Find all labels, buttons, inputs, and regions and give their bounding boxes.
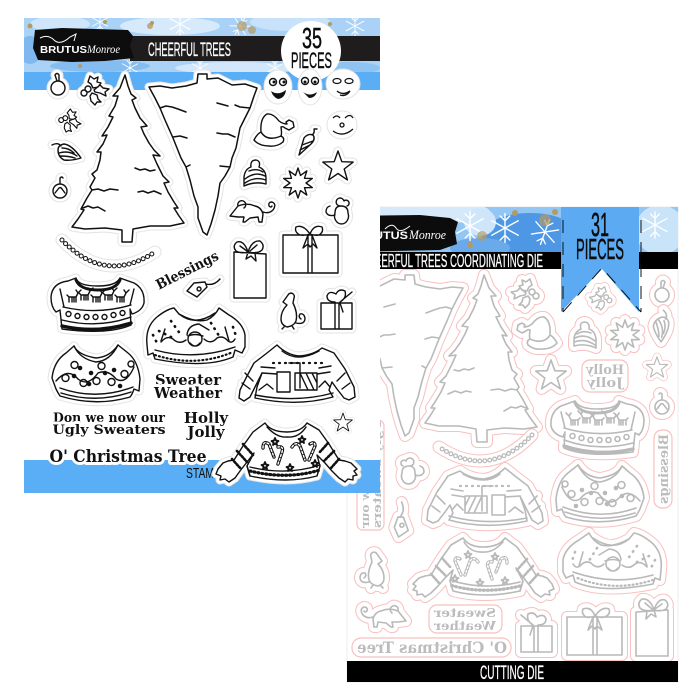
die: standing mouse xyxy=(360,552,384,588)
die: candy cane sweater xyxy=(413,538,554,597)
die: don we now text: Don we now our xyxy=(359,418,372,528)
stamp: holly jolly text: Holly xyxy=(184,409,229,427)
ribbon: 31 pieces xyxy=(561,206,641,312)
die: santa hat xyxy=(517,317,557,349)
die: mouse with curled tail xyxy=(361,606,406,627)
stamp: holly jolly text: Jolly xyxy=(185,423,226,441)
stamp: small star xyxy=(334,413,352,431)
stamp: face two xyxy=(298,69,322,105)
ribbon: 31 pieces: PIECES xyxy=(576,234,624,266)
die: garland xyxy=(439,435,532,461)
blue band bottom with label: STAMP xyxy=(186,465,221,482)
logo: Brutus Monroe xyxy=(33,28,134,62)
die: tag xyxy=(388,502,418,540)
die: round mouse xyxy=(401,458,424,484)
die: sweater weather text xyxy=(429,605,502,633)
die: large star xyxy=(536,360,566,389)
blue band top xyxy=(24,72,380,90)
die: holly small xyxy=(589,287,612,310)
die sheet footer banner: CUTTING DIE xyxy=(480,663,544,684)
stamp: holly small xyxy=(56,106,85,136)
badge: 35 pieces: PIECES xyxy=(291,48,332,73)
stamp: round ornament xyxy=(51,74,65,95)
die: holly jolly text: Holly xyxy=(586,363,624,378)
die: round ornament xyxy=(655,280,669,302)
stamp: mouse with curled tail xyxy=(230,201,275,222)
logo: Brutus Monroe: BRUTUS xyxy=(40,45,87,56)
stamp: sweater weather text: Weather xyxy=(153,384,223,402)
stamp: beanie xyxy=(244,160,266,186)
die: gift bag xyxy=(636,599,668,656)
die: beanie xyxy=(574,322,596,348)
stamp: standing mouse xyxy=(281,293,305,329)
die sheet logo: BRUTUS xyxy=(356,230,408,242)
badge: 35 pieces: 35 xyxy=(302,23,322,55)
stamp: santa sweater xyxy=(147,308,245,364)
stamp: santa hat xyxy=(254,114,294,146)
die: sweater weather text: Weather xyxy=(433,619,497,633)
die: don we now text: Ugly Sweaters xyxy=(371,418,384,528)
die: lights sweater xyxy=(556,465,644,522)
stamp: round mouse xyxy=(326,198,349,224)
stamp: face one xyxy=(264,70,292,104)
die: blessings text: Blessings xyxy=(657,434,672,504)
stamp: face three xyxy=(326,69,360,99)
die: small star xyxy=(646,357,668,377)
die: holly large xyxy=(511,279,539,308)
die: burst xyxy=(611,320,639,350)
stamp: lights sweater xyxy=(52,345,140,402)
logo: Brutus Monroe: Monroe xyxy=(86,42,121,56)
die: christmas tree text: O' Christmas Tree xyxy=(357,638,507,657)
panel: cutting die sheet xyxy=(347,200,685,684)
die: sweater weather text: Sweater xyxy=(433,606,496,620)
title banner xyxy=(130,36,380,61)
die: don we now text xyxy=(357,418,384,530)
stamp: christmas tree text: O' Christmas Tree xyxy=(50,447,207,467)
die: holly jolly text xyxy=(582,360,628,392)
die: holly jolly text: Jolly xyxy=(587,376,624,391)
die: swirl ornament xyxy=(655,393,669,414)
die: teardrop ornament xyxy=(649,310,675,343)
die: small gift xyxy=(521,613,552,652)
stamp: don we now text: Ugly Sweaters xyxy=(52,423,166,438)
stamp: candy cane sweater xyxy=(216,423,357,482)
blue band bottom with label xyxy=(24,460,380,493)
die sheet title banner: CHEERFUL TREES COORDINATING DIE xyxy=(361,251,543,271)
die sheet footer banner xyxy=(347,661,678,684)
die: tree xyxy=(425,275,537,442)
stamp: don we now text: Don we now our xyxy=(53,411,165,426)
stamp: large star xyxy=(323,151,353,180)
stamp sheet snowy header xyxy=(24,18,380,72)
stamp: holly large xyxy=(81,76,109,105)
ribbon: 31 pieces: 31 xyxy=(591,206,609,243)
stamp: icicle ornament xyxy=(299,129,317,155)
stamp: garland xyxy=(62,240,155,266)
die: santa sweater xyxy=(563,533,661,589)
title banner: CHEERFUL TREES xyxy=(148,40,231,61)
stamp: burst xyxy=(284,168,312,198)
stamp: tree xyxy=(72,75,184,242)
die sheet logo: Monroe xyxy=(408,227,446,242)
die: gifts sweater xyxy=(427,468,543,525)
stamp: reindeer sweater xyxy=(51,278,144,331)
stamp: sweater weather text: Sweater xyxy=(155,371,222,389)
stamp: smiling face xyxy=(327,111,357,139)
stamp: large gift xyxy=(283,226,338,273)
die: large gift xyxy=(567,608,622,655)
stamp: gift bag xyxy=(234,241,266,298)
stamp: swirl ornament xyxy=(53,177,67,198)
stamp: blessings text: Blessings xyxy=(154,248,221,293)
badge: 35 pieces xyxy=(281,21,341,81)
die sheet snowy header xyxy=(380,207,678,252)
die: inverted tree xyxy=(355,275,463,436)
stamp: inverted tree xyxy=(149,74,257,235)
stamp: gifts sweater xyxy=(239,345,355,402)
stamp: tag xyxy=(187,279,220,297)
die: reindeer sweater xyxy=(551,401,644,454)
panel: stamp sheet xyxy=(18,13,380,493)
stamp: teardrop ornament xyxy=(52,144,81,160)
stamp: small gift xyxy=(321,290,352,329)
die sheet logo xyxy=(347,215,458,252)
